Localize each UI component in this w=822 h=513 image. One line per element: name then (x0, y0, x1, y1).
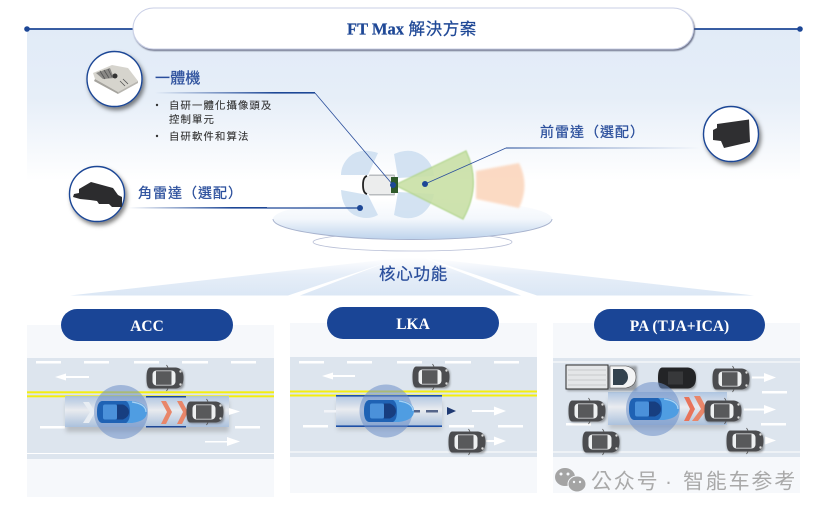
icon: corner radar (70, 166, 124, 222)
PA label: PA (TJA+ICA) (630, 318, 729, 335)
congestion band (608, 392, 727, 429)
top section background (27, 29, 800, 181)
sensor halo (626, 382, 680, 436)
icon: front radar (704, 106, 758, 162)
arrow: right lane (486, 436, 506, 446)
oncoming car (146, 365, 184, 391)
watermark: 公众号 (591, 470, 659, 494)
fan under platform (70, 258, 754, 296)
arrow: left lane (322, 372, 355, 380)
LKA label (327, 307, 499, 339)
panel: PA (TJA+ICA) (553, 309, 800, 493)
heading: corner radar: 角雷達（選配） (138, 185, 243, 201)
sensor halo (360, 384, 412, 438)
car: top right (712, 366, 750, 392)
title bar: 解決方案 (408, 20, 477, 38)
icon: integrated camera unit (87, 52, 142, 106)
watermark: · (665, 470, 672, 494)
lane keeping band (324, 395, 456, 430)
watermark (555, 468, 797, 494)
car: lead (704, 398, 742, 424)
sensor coverage: blue corner sectors (341, 151, 434, 218)
title bar (24, 8, 803, 49)
panel: LKA (290, 307, 537, 493)
truck (566, 365, 637, 391)
car: bottom right (726, 428, 764, 454)
bullet list: 自研一體化攝像頭及 (169, 99, 272, 112)
platform discs (273, 198, 552, 251)
arrow: center lane (472, 406, 506, 416)
heading: integrated unit: 一體機 (155, 70, 201, 87)
front radar leader line (422, 148, 700, 187)
black car (658, 368, 696, 390)
PA label (594, 309, 765, 341)
lead car (186, 399, 224, 425)
ACC label (61, 309, 233, 341)
car: middle left (568, 398, 606, 424)
bullet list: 自研軟件和算法 (169, 130, 249, 143)
orange long-range radar sector (476, 163, 524, 208)
title bar: FT Max (347, 20, 405, 38)
heading: core functions: 核心功能 (379, 264, 448, 284)
bullet list (156, 99, 272, 143)
bullet list: 控制單元 (169, 113, 215, 126)
ego car (97, 401, 147, 423)
corner radar leader line (128, 205, 363, 211)
adjacent car (448, 429, 486, 455)
oncoming car (412, 364, 450, 390)
green camera sector (395, 151, 473, 219)
sensor halo (94, 385, 148, 439)
ACC label: ACC (130, 318, 164, 335)
arrow: left lane (55, 374, 89, 380)
ego car (364, 400, 414, 422)
LKA label: LKA (396, 316, 431, 333)
car: bottom left (582, 429, 620, 455)
center car (363, 174, 398, 196)
panel: ACC (27, 309, 274, 497)
sensing band (65, 396, 240, 432)
arrow: right lane (205, 437, 240, 446)
camera leader line (155, 92, 396, 188)
watermark: 智能车参考 (683, 470, 797, 494)
ego car (629, 398, 679, 420)
heading: front radar: 前雷達（選配） (540, 124, 645, 140)
arrows: traffic direction (744, 373, 776, 444)
